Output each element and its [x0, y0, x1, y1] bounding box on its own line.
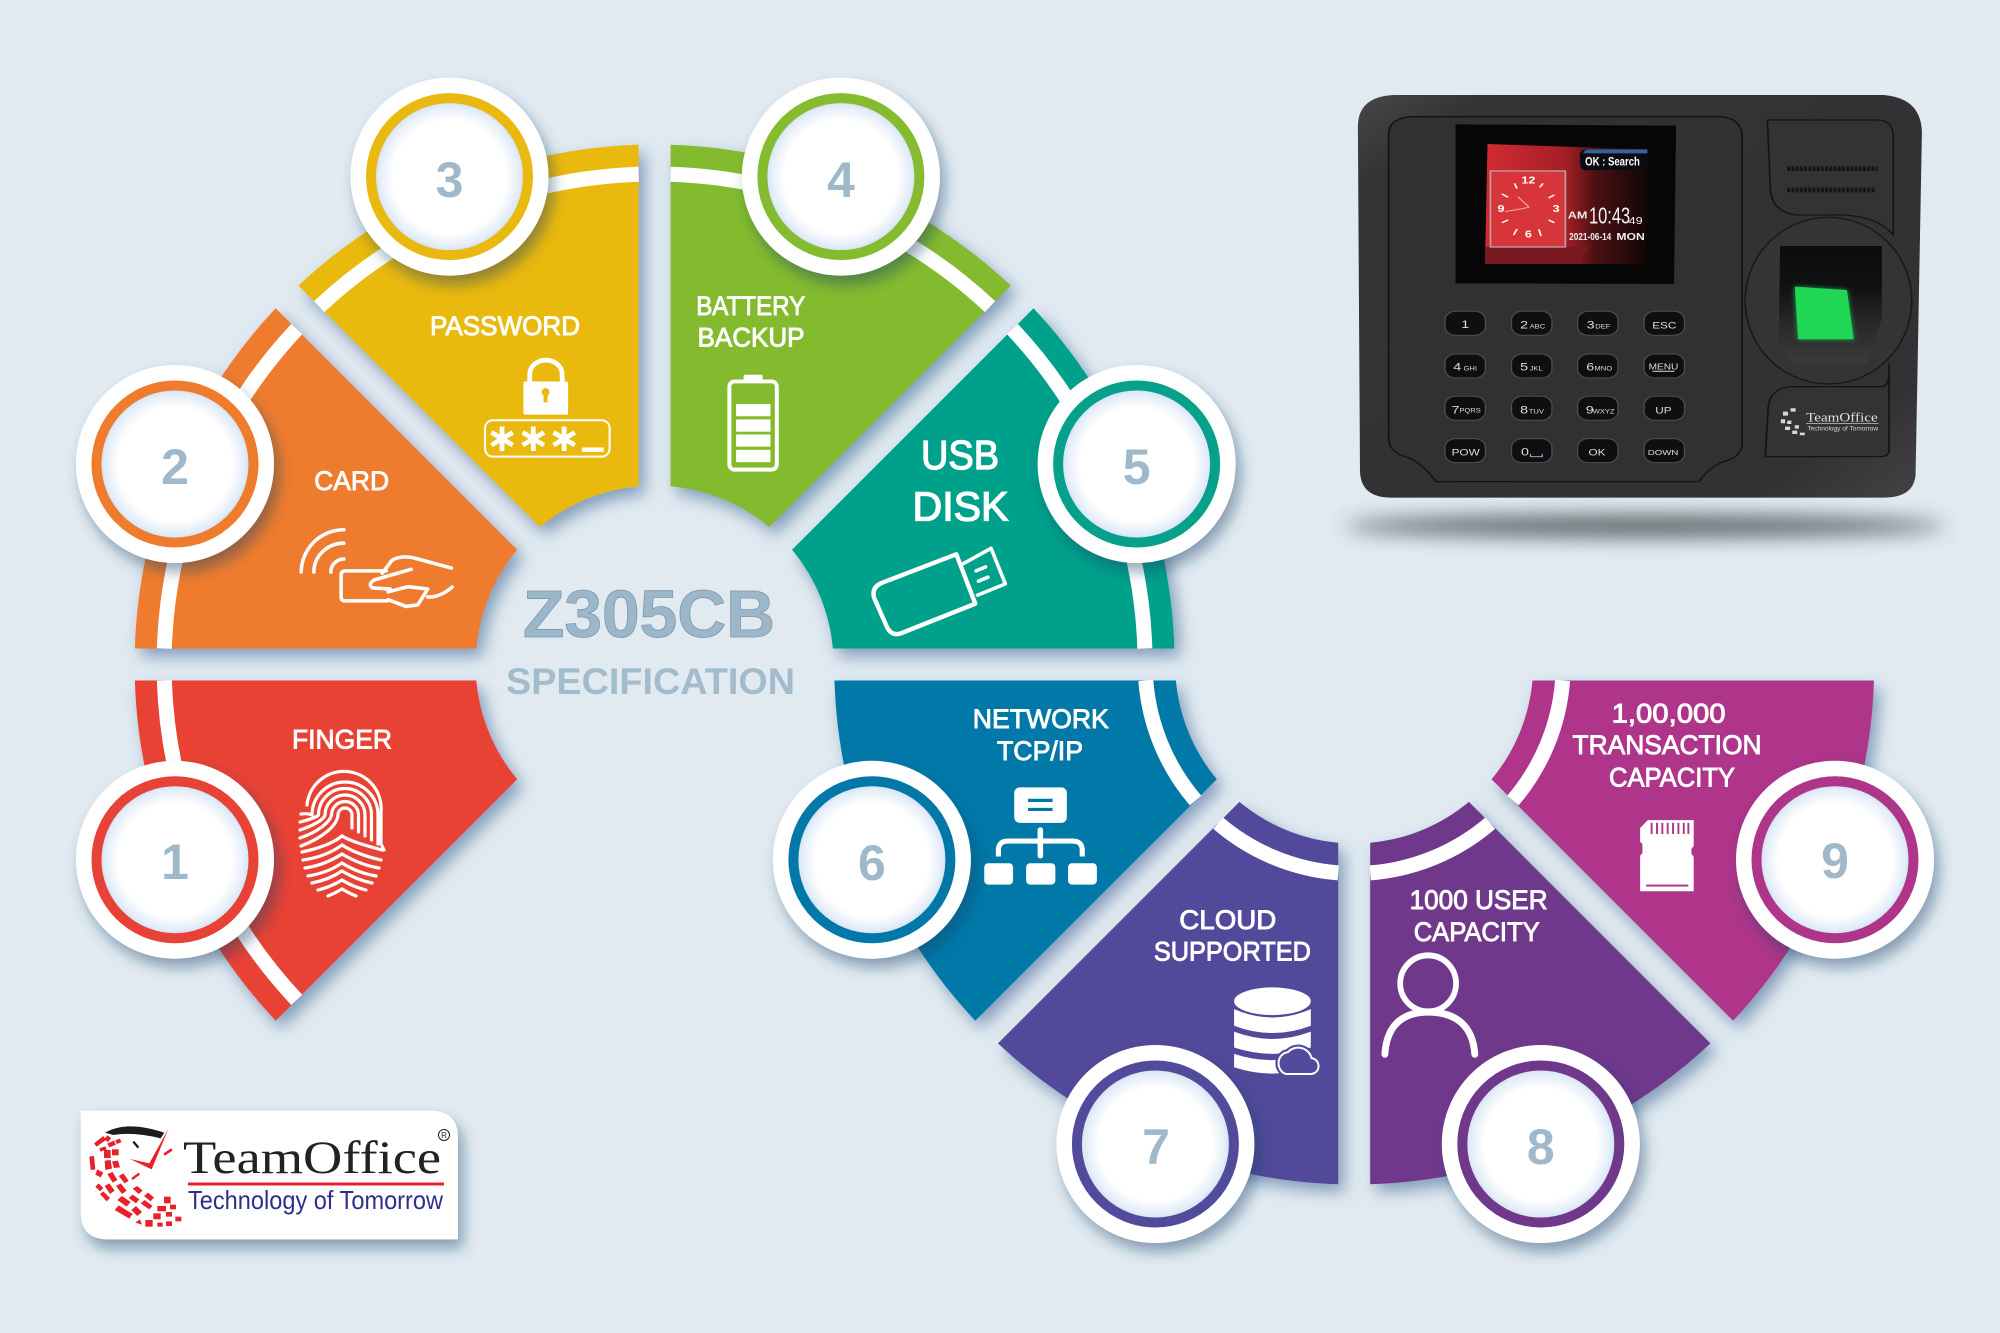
badge: 1: 1 [161, 834, 189, 890]
device photo: biometric terminal: 9 [1586, 403, 1594, 416]
badge: 8 [1442, 1045, 1640, 1243]
label: 1000 user capacity [1410, 885, 1548, 947]
device photo: biometric terminal: 2 [1520, 318, 1528, 331]
device photo: biometric terminal: 1 [1461, 317, 1469, 331]
device logo [1781, 408, 1879, 435]
device photo: biometric terminal: 2021-06-14 [1569, 232, 1612, 243]
icon: lock and password field [485, 360, 610, 457]
label: transaction capacity [1572, 698, 1762, 792]
device photo: biometric terminal: OK [1588, 448, 1605, 458]
icon: sd card [1640, 820, 1694, 891]
device photo: biometric terminal: MNO [1594, 366, 1612, 372]
label: battery backup [696, 291, 805, 353]
badge: 8: 8 [1527, 1119, 1555, 1175]
device photo: biometric terminal: POW [1452, 448, 1480, 458]
device photo: biometric terminal: TUV [1529, 409, 1544, 415]
device photo: biometric terminal: JKL [1530, 366, 1543, 372]
device logo: TeamOffice [1806, 411, 1878, 425]
label: battery backup: BATTERY [696, 291, 805, 321]
badge: 1 [76, 761, 274, 959]
badge: 6: 6 [858, 835, 886, 891]
badge: 4: 4 [827, 152, 855, 208]
label: password: PASSWORD [430, 311, 580, 341]
screen [1456, 124, 1676, 284]
device photo: biometric terminal: 9 [1497, 204, 1504, 215]
logo: TeamOffice: R [441, 1131, 447, 1140]
label: network tcp/ip [973, 704, 1109, 766]
label: transaction capacity: TRANSACTION [1572, 730, 1762, 760]
badge: 2 [76, 365, 274, 563]
device photo: biometric terminal: 6 [1525, 230, 1532, 240]
panel: 3 password [298, 78, 639, 527]
panel: 2 card [76, 308, 517, 648]
badge: 5: 5 [1123, 439, 1151, 495]
badge: 5 [1038, 365, 1236, 563]
label: 1000 user capacity: 1000 USER [1410, 885, 1548, 915]
panel: 5 usb disk [792, 308, 1236, 648]
panel: 6 network [773, 680, 1217, 1021]
badge: 4 [742, 78, 940, 276]
device photo: biometric terminal: ESC [1652, 321, 1677, 331]
device photo: biometric terminal: UP [1655, 405, 1672, 416]
device photo: biometric terminal [1345, 95, 1945, 537]
label: battery backup: BACKUP [698, 323, 804, 353]
device photo: biometric terminal: 49 [1629, 216, 1643, 227]
label: card: CARD [314, 466, 389, 496]
device photo: biometric terminal: DOWN [1648, 448, 1678, 457]
badge: 7 [1056, 1045, 1254, 1243]
icon: usb stick [873, 548, 1005, 634]
device photo: biometric terminal: ABC [1530, 324, 1545, 330]
logo tagline: Technology of Tomorrow [188, 1185, 443, 1215]
badge: 6 [773, 761, 971, 959]
badge: 9: 9 [1821, 833, 1849, 889]
device photo: biometric terminal: 8 [1520, 403, 1528, 416]
label: transaction capacity: 1,00,000 [1612, 698, 1726, 728]
badge: 2: 2 [161, 439, 189, 495]
label: usb disk: DISK [912, 484, 1008, 530]
device photo: biometric terminal: WXYZ [1593, 409, 1615, 415]
label: cloud supported: CLOUD [1179, 905, 1276, 935]
icon: fingerprint [300, 771, 384, 896]
icon: contactless card [301, 530, 452, 606]
device photo: biometric terminal: DEF [1595, 324, 1610, 330]
device photo: biometric terminal: 4 [1453, 360, 1461, 373]
panel: 9 transaction capacity [1492, 680, 1934, 1021]
panel: 4 battery backup [671, 78, 1011, 527]
label: network tcp/ip: TCP/IP [997, 736, 1083, 766]
icon: user [1385, 955, 1475, 1054]
device photo: biometric terminal: 5 [1520, 360, 1528, 373]
device photo: biometric terminal: 6 [1586, 360, 1594, 373]
logo mark [89, 1126, 181, 1227]
label: finger: FINGER [292, 725, 392, 755]
label: cloud supported: SUPPORTED [1154, 936, 1311, 966]
device photo: biometric terminal: OK : Search [1585, 155, 1640, 168]
keypad [1445, 311, 1684, 463]
panel: 1 finger [76, 680, 517, 1021]
device photo: biometric terminal: GHI [1464, 366, 1477, 372]
title [506, 577, 795, 702]
label: usb disk [912, 432, 1008, 530]
panel: 8 user capacity [1370, 802, 1710, 1243]
logo wordmark: TeamOffice [183, 1132, 441, 1184]
device photo: biometric terminal: 10:43 [1589, 204, 1630, 229]
device photo: biometric terminal: MENU [1649, 362, 1678, 371]
icon: cloud database [1234, 987, 1319, 1074]
device photo: biometric terminal: 3 [1553, 204, 1560, 215]
device photo: biometric terminal: AM [1568, 211, 1587, 221]
device photo: biometric terminal: 3 [1587, 318, 1595, 331]
badge: 3: 3 [436, 152, 463, 208]
badge: 3 [350, 78, 548, 276]
device logo: Technology of Tomorrow [1807, 424, 1879, 432]
panel: 7 cloud supported [998, 802, 1338, 1243]
logo: TeamOffice [81, 1111, 458, 1239]
label: usb disk: USB [921, 432, 999, 478]
device photo: biometric terminal: 12 [1521, 175, 1535, 186]
label: network tcp/ip: NETWORK [973, 704, 1109, 734]
title: Z305CB [523, 577, 775, 652]
label: transaction capacity: CAPACITY [1609, 762, 1735, 792]
icon: battery [729, 375, 777, 470]
label: cloud supported [1154, 905, 1311, 966]
device photo: biometric terminal: PQRS [1459, 408, 1481, 414]
icon: network tree [984, 787, 1097, 885]
label: 1000 user capacity: CAPACITY [1414, 917, 1540, 947]
subtitle: SPECIFICATION [506, 661, 795, 702]
badge: 9 [1736, 761, 1934, 959]
device photo: biometric terminal: MON [1616, 232, 1645, 243]
device photo: biometric terminal: 0 [1521, 445, 1529, 458]
device photo: biometric terminal: 7 [1452, 403, 1460, 416]
badge: 7: 7 [1142, 1119, 1170, 1175]
